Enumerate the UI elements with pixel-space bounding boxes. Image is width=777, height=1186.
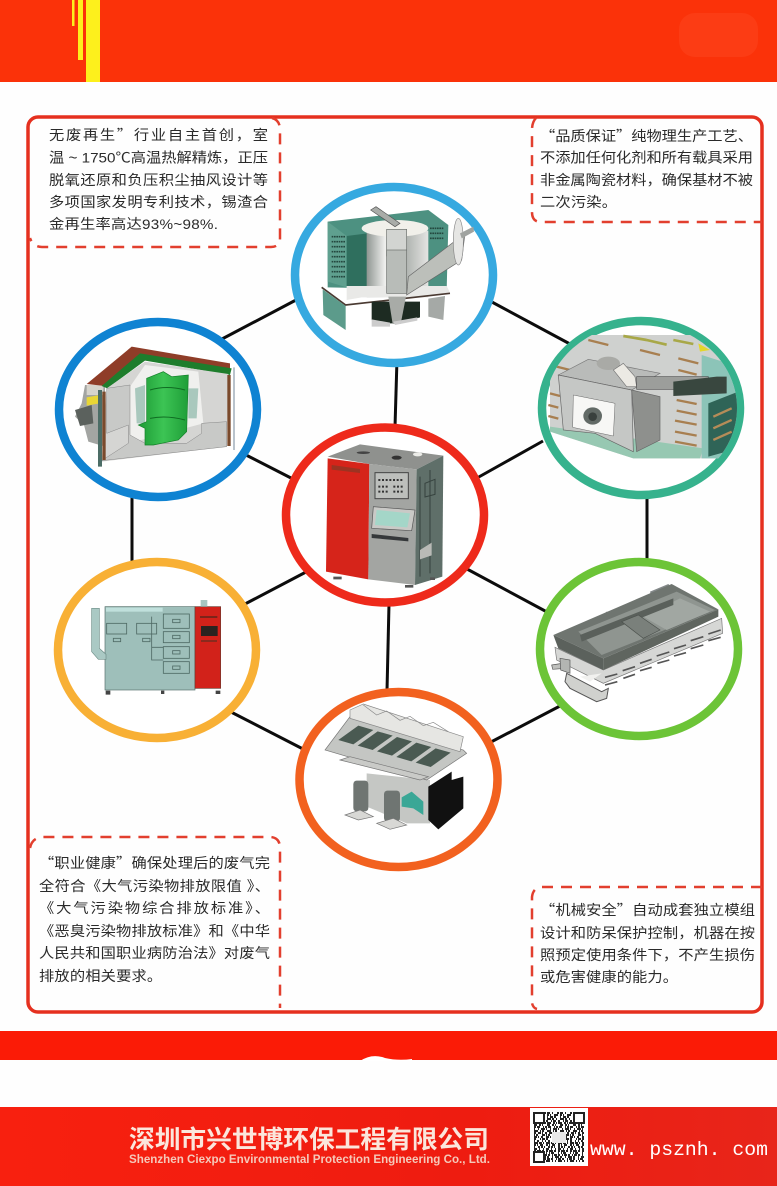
node: main machine in red ring	[286, 428, 484, 602]
panel: occupational health text: 全符合《大气污染物排放限值 》、	[39, 878, 270, 895]
panel: waste regeneration text: 脱氧还原和负压积尘抽风设计等	[49, 172, 268, 189]
node: cooler module in teal ring	[542, 321, 740, 495]
panel: occupational health text	[30, 837, 280, 1008]
panel: occupational health text: 《大气污染物综合排放标准》、	[39, 901, 270, 917]
middle red band	[0, 1031, 777, 1061]
panel: waste regeneration text	[30, 118, 280, 247]
panel: quality assurance text: 不添加任何化剂和所有载具采用	[540, 150, 753, 166]
panel: waste regeneration text: 金再生率高达93%~98%.	[49, 217, 218, 233]
node: side cabinet in yellow ring	[58, 562, 256, 738]
company name: 深圳市兴世博环保工程有限公司	[129, 1126, 489, 1154]
QR code	[530, 1108, 588, 1166]
panel: occupational health text: 人民共和国职业病防治法》对废气	[39, 946, 270, 962]
main red frame	[28, 117, 762, 1012]
company english name: Shenzhen Ciexpo Environmental Protection Engineering Co., Ltd.	[129, 1152, 490, 1166]
panel: mechanical safety text: 照预定使用条件下，不产生损伤	[540, 948, 755, 964]
panel: occupational health text: 排放的相关要求。	[39, 969, 162, 985]
panel: mechanical safety text: 设计和防呆保护控制，机器在按	[540, 926, 755, 942]
website url: www. psznh. com	[590, 1139, 768, 1161]
panel: quality assurance text: 非金属陶瓷材料，确保基材不被	[540, 173, 753, 189]
node: feeder machine in light blue ring	[295, 187, 493, 363]
panel: occupational health text: 《恶臭污染物排放标准》和《中华	[39, 924, 270, 940]
panel: waste regeneration text: 多项国家发明专利技术，锡渣合	[49, 195, 268, 211]
panel: waste regeneration text: 温 ~ 1750℃高温热解精炼，正压	[49, 150, 268, 166]
node: burner tray in green ring	[540, 562, 738, 736]
panel: quality assurance text: 二次污染。	[540, 195, 617, 211]
panel: mechanical safety text: 或危害健康的能力。	[540, 970, 678, 986]
node: crucible section in blue ring	[59, 322, 257, 497]
panel: mechanical safety text	[532, 887, 762, 1009]
panel: quality assurance text	[532, 118, 762, 222]
panel: mechanical safety text: “机械安全”自动成套独立模组	[540, 900, 755, 920]
panel: occupational health text: “职业健康”确保处理后的废气完	[39, 853, 270, 873]
top red banner	[0, 0, 777, 82]
panel: quality assurance text: “品质保证”纯物理生产工艺、	[540, 126, 753, 146]
panel: waste regeneration text: 无废再生”行业自主首创，室	[49, 125, 268, 145]
footer red band	[0, 1107, 777, 1186]
node: vibrating tray in orange ring	[300, 692, 498, 867]
connector lines	[132, 300, 647, 749]
